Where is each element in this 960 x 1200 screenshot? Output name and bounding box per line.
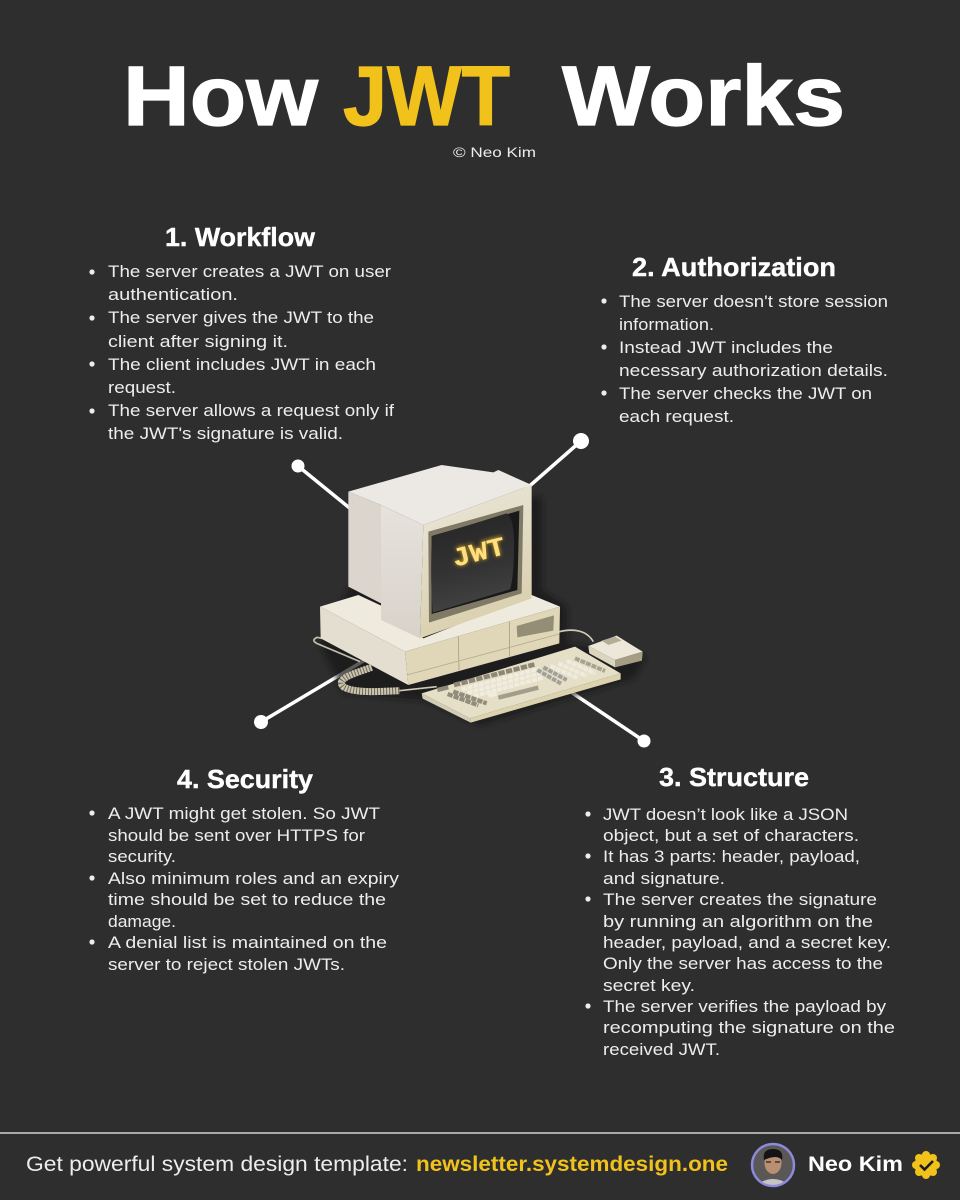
- connector: to structure: [565, 688, 650, 748]
- keyboard: [422, 647, 621, 723]
- mouse: [559, 630, 643, 667]
- list: structure points: header, payload, and a secret key.: [603, 933, 891, 952]
- list: structure points: and signature.: [603, 869, 725, 888]
- list: workflow points: The server allows a request only if: [108, 401, 394, 420]
- list: structure points: object, but a set of characters.: [603, 826, 859, 845]
- list: structure points: Only the server has access to the: [603, 954, 883, 973]
- title: [123, 49, 845, 143]
- monitor: [348, 465, 532, 638]
- connector: to workflow: [292, 460, 352, 510]
- heading: security: 4. Security: [177, 764, 314, 794]
- list: structure points: secret key.: [603, 976, 695, 995]
- list: security points: A JWT might get stolen. So JWT: [108, 804, 380, 823]
- author credit: © Neo Kim: [453, 144, 536, 160]
- list: workflow points: request.: [108, 378, 176, 397]
- list: security points: Also minimum roles and an expiry: [108, 869, 400, 888]
- computer base: [320, 595, 560, 685]
- list: authorization points: [601, 292, 888, 426]
- list: security points: security.: [108, 847, 176, 866]
- list: security points: A denial list is maintained on the: [108, 933, 387, 952]
- title: How: [123, 49, 319, 143]
- list: structure points: JWT doesn’t look like a JSON: [603, 805, 848, 824]
- title: JWT: [343, 49, 510, 143]
- list: workflow points: The server gives the JWT to the: [108, 308, 374, 327]
- connector: to security: [254, 660, 365, 729]
- list: workflow points: The server creates a JWT on user: [108, 262, 391, 281]
- list: authorization points: The server checks the JWT on: [619, 384, 872, 403]
- screen text: JWT: JWT: [450, 533, 509, 576]
- panel: security: [89, 764, 400, 974]
- list: structure points: The server verifies the payload by: [603, 997, 887, 1016]
- list: authorization points: information.: [619, 315, 714, 334]
- footer call to action: Get powerful system design template:: [26, 1153, 408, 1176]
- list: authorization points: The server doesn't store session: [619, 292, 888, 311]
- list: workflow points: [89, 262, 394, 443]
- list: security points: server to reject stolen JWTs.: [108, 955, 345, 974]
- keys: [437, 658, 605, 705]
- heading: authorization: 2. Authorization: [632, 252, 836, 282]
- list: structure points: The server creates the signature: [603, 890, 877, 909]
- list: security points: time should be set to reduce the: [108, 890, 386, 909]
- author name: Neo Kim: [808, 1153, 903, 1176]
- list: security points: should be sent over HTTPS for: [108, 826, 365, 845]
- list: workflow points: the JWT's signature is valid.: [108, 424, 343, 443]
- list: authorization points: each request.: [619, 407, 734, 426]
- screen text: JWT: JWT: [450, 533, 509, 576]
- list: structure points: received JWT.: [603, 1040, 720, 1059]
- list: authorization points: necessary authorization details.: [619, 361, 888, 380]
- panel: structure: [585, 762, 895, 1059]
- list: authorization points: Instead JWT includes the: [619, 338, 833, 357]
- list: structure points: It has 3 parts: header, payload,: [603, 847, 860, 866]
- coiled cable: [341, 667, 437, 692]
- screen: [431, 513, 514, 613]
- connector: to authorization: [525, 433, 589, 490]
- list: structure points: [585, 805, 895, 1059]
- panel: authorization: [601, 252, 888, 426]
- footer call to action: newsletter.systemdesign.one: [416, 1153, 728, 1176]
- soft shadows: [320, 497, 647, 725]
- cable: back loop: [314, 637, 360, 662]
- title: Works: [562, 49, 845, 143]
- list: workflow points: The client includes JWT in each: [108, 355, 376, 374]
- avatar: [752, 1144, 794, 1186]
- list: security points: damage.: [108, 912, 176, 931]
- footer call to action: [26, 1153, 728, 1176]
- list: workflow points: client after signing it.: [108, 332, 288, 351]
- illustration: retro computer: [314, 465, 647, 725]
- heading: structure: 3. Structure: [659, 762, 809, 792]
- heading: workflow: 1. Workflow: [165, 222, 316, 252]
- icon: verified badge: [912, 1151, 940, 1179]
- list: structure points: by running an algorithm on the: [603, 912, 873, 931]
- list: workflow points: authentication.: [108, 285, 238, 304]
- list: structure points: recomputing the signature on the: [603, 1018, 895, 1037]
- footer bar: [0, 1132, 960, 1186]
- panel: workflow: [89, 222, 394, 443]
- list: security points: [89, 804, 400, 974]
